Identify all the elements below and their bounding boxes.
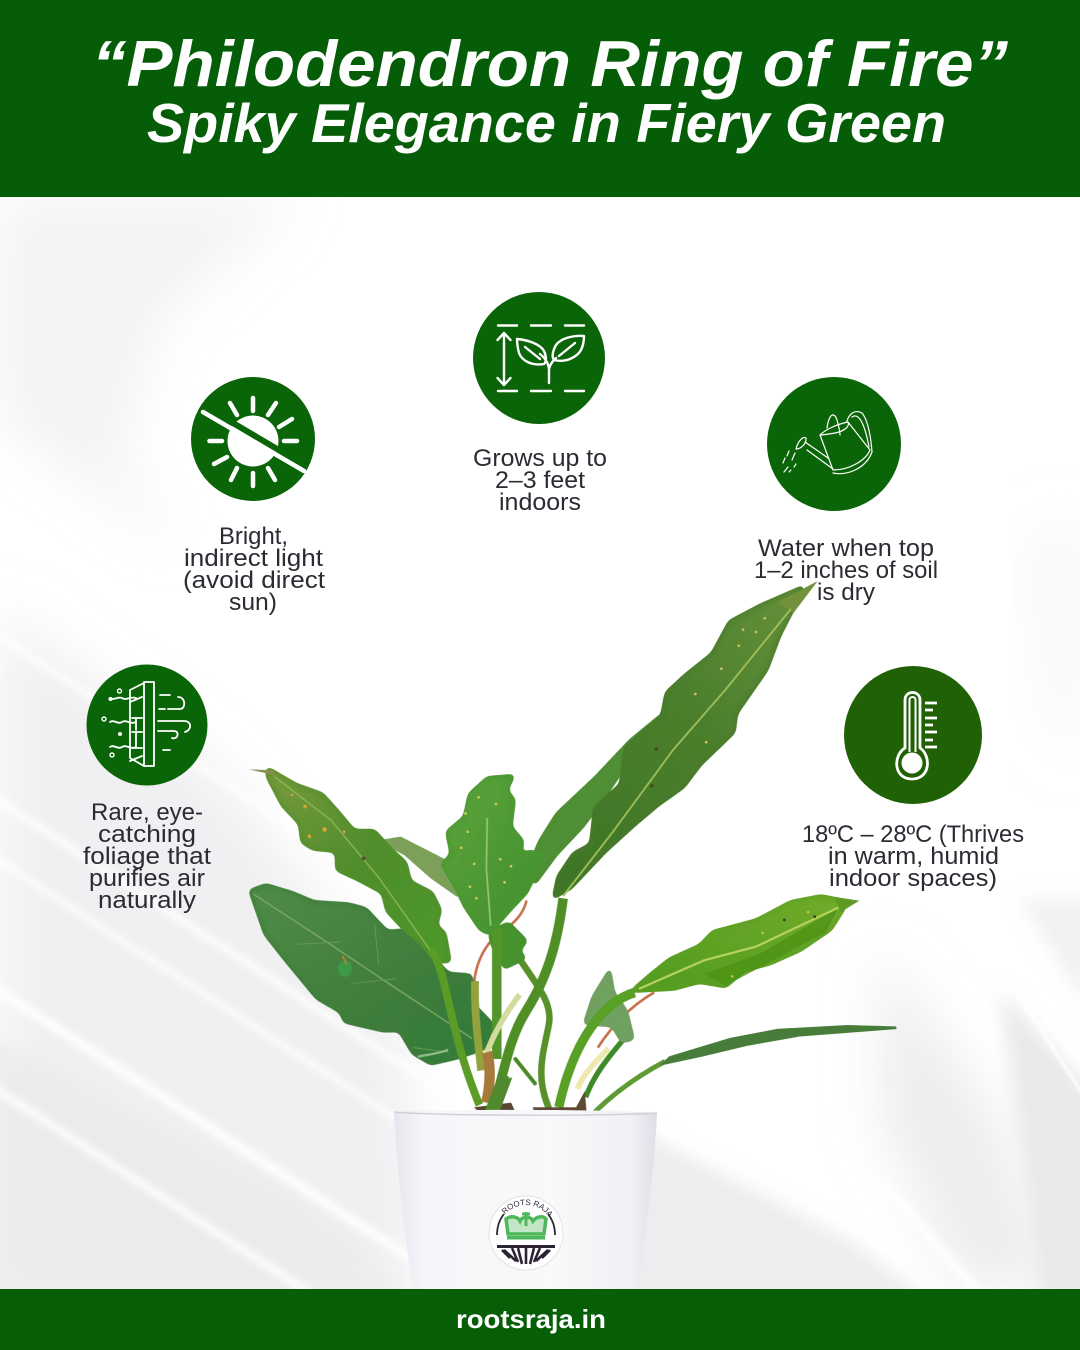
stems: front — [431, 898, 665, 1116]
logo sticker — [488, 1196, 564, 1270]
title: “Philodendron Ring of Fire” — [92, 27, 1009, 100]
text: temperature — [802, 821, 1024, 892]
leaf: small mid right — [584, 969, 634, 1042]
text: light: (avoid direct — [183, 567, 325, 594]
text: foliage: catching — [98, 821, 196, 848]
plant: philodendron — [249, 581, 896, 1117]
subtitle: Spiky Elegance in Fiery Green — [147, 92, 946, 154]
leaf: large lower left — [250, 885, 493, 1064]
logo sticker: ROOTS RAJA — [502, 1200, 552, 1218]
icon: thermometer — [844, 666, 982, 804]
leaf: right bright — [630, 896, 859, 992]
text: foliage: foliage that — [83, 843, 211, 870]
text: growth: Grows up to — [473, 445, 607, 472]
text: growth: indoors — [499, 489, 581, 516]
icon: indirect sun — [191, 377, 315, 501]
header band — [0, 0, 1080, 197]
text: temperature: in warm, humid — [828, 843, 999, 870]
icon: air purifying filter — [86, 664, 208, 786]
text: light — [183, 523, 325, 616]
text: light: sun) — [229, 589, 277, 616]
leaf: tall upper right — [553, 581, 818, 898]
text: foliage: Rare, eye- — [91, 799, 203, 826]
sheaths at base — [475, 981, 520, 1116]
leaf: upper left wavy — [249, 768, 450, 962]
text: water: Water when top — [758, 535, 934, 562]
leaf: small under center — [489, 923, 527, 969]
soil — [411, 1077, 619, 1117]
text: temperature: indoor spaces) — [829, 865, 997, 892]
stem: rear — [474, 902, 549, 1108]
text: foliage: purifies air — [89, 865, 205, 892]
icon: growth height — [473, 292, 605, 424]
text: water — [754, 535, 938, 606]
text: growth: 2–3 feet — [495, 467, 585, 494]
website: rootsraja.in — [456, 1304, 606, 1334]
leaf: narrow behind tall leaf — [526, 713, 663, 884]
pot — [394, 1110, 657, 1289]
leaf: center spotted — [441, 775, 545, 934]
text: foliage — [83, 799, 211, 914]
text: growth — [473, 445, 607, 516]
text: temperature: 18ºC – 28ºC (Thrives — [802, 821, 1024, 848]
leaf: behind center — [379, 837, 464, 896]
text: water: is dry — [817, 579, 875, 606]
text: light: Bright, — [219, 523, 288, 550]
text: light: indirect light — [184, 545, 323, 572]
text: foliage: naturally — [98, 887, 196, 914]
text: water: 1–2 inches of soil — [754, 557, 938, 584]
leaf: thin lower right — [661, 1026, 896, 1065]
icon: watering can — [767, 377, 901, 511]
footer band — [0, 1289, 1080, 1350]
